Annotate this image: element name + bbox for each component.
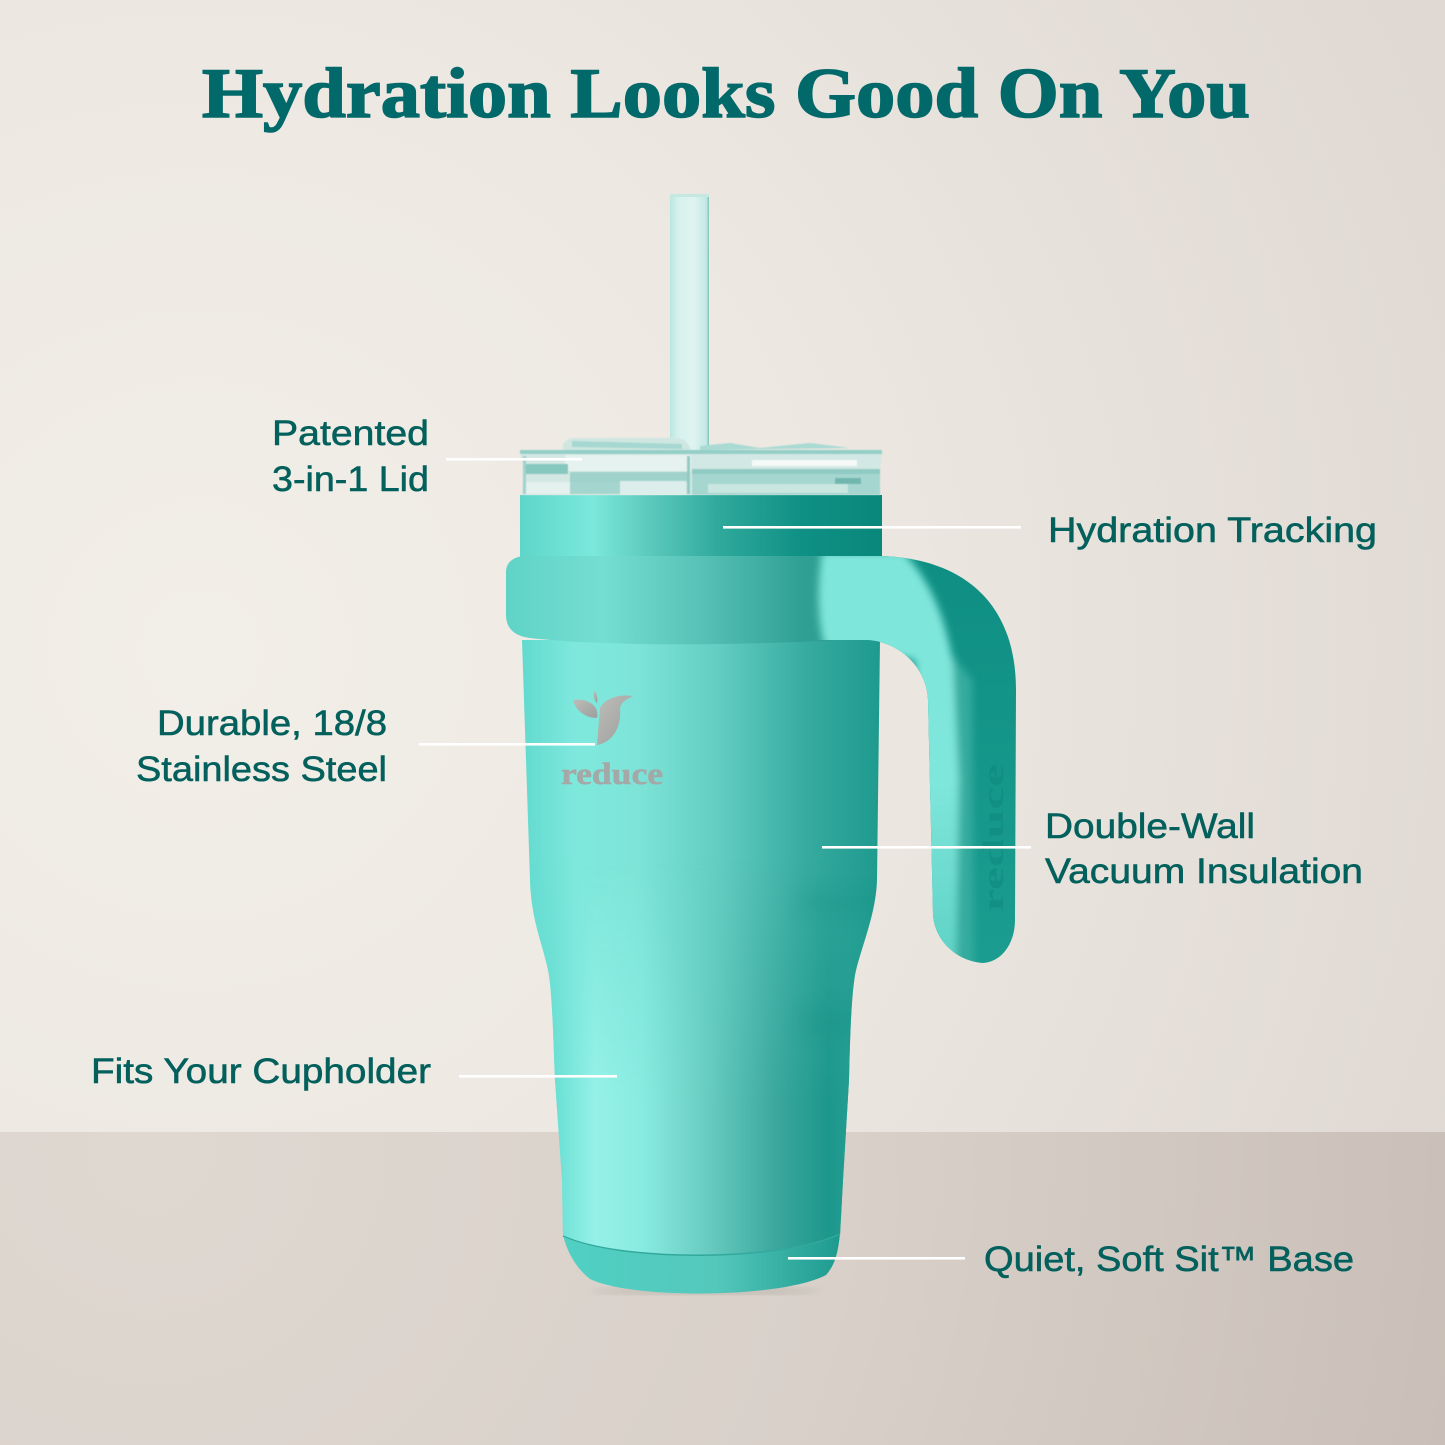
reduce logo: reduce xyxy=(561,756,663,791)
soft sit base xyxy=(563,1233,840,1294)
collar xyxy=(520,495,882,559)
callout: stainless steel: Stainless Steel xyxy=(136,750,387,789)
ring band xyxy=(506,556,840,644)
background floor xyxy=(0,1132,1445,1445)
tumbler illustration xyxy=(506,194,1025,1294)
title: Hydration Looks Good On You xyxy=(202,55,1250,133)
callout: hydration tracking: Hydration Tracking xyxy=(1048,511,1377,550)
callout: stainless steel: Durable, 18/8 xyxy=(157,704,387,743)
handle grip highlight xyxy=(819,552,974,975)
lid xyxy=(520,438,882,495)
straw xyxy=(670,194,709,456)
handle outer xyxy=(880,556,1016,963)
floor shadow xyxy=(590,1288,820,1294)
callout: cupholder: Fits Your Cupholder xyxy=(91,1052,431,1091)
callout: stainless steel xyxy=(136,704,595,789)
callout: patented 3-in-1 lid xyxy=(272,414,582,499)
background wall xyxy=(0,0,1445,1132)
callout: soft sit base: Quiet, Soft Sit™ Base xyxy=(984,1240,1354,1279)
callout: patented 3-in-1 lid: 3-in-1 Lid xyxy=(272,460,429,499)
reduce logo xyxy=(561,691,663,791)
base seam xyxy=(563,1234,840,1255)
callout: patented 3-in-1 lid: Patented xyxy=(272,414,429,453)
callout: vacuum insulation xyxy=(822,807,1363,891)
tumbler body xyxy=(510,640,890,1280)
callout: vacuum insulation: Vacuum Insulation xyxy=(1045,852,1363,891)
handle engraved wordmark: reduce xyxy=(977,764,1010,912)
callout: vacuum insulation: Double-Wall xyxy=(1045,807,1255,846)
